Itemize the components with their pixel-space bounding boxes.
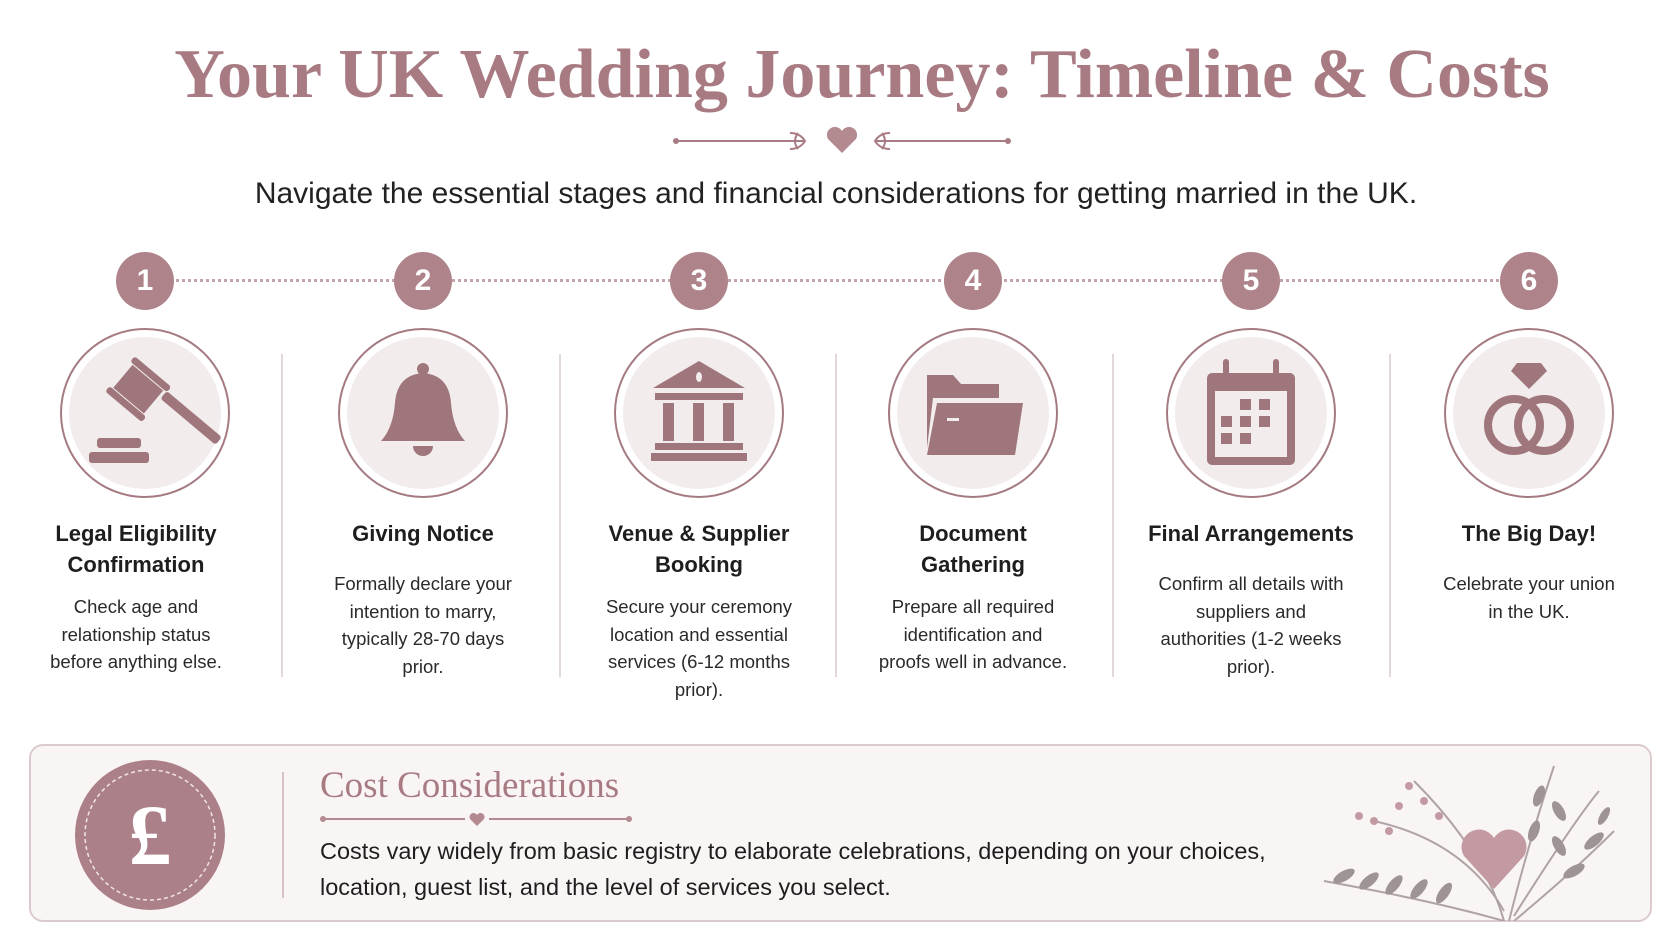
step 3 text bbox=[608, 521, 790, 577]
step 3 text: Booking bbox=[655, 552, 743, 577]
step 4: document gathering bbox=[879, 328, 1067, 672]
step 3: venue booking: Secure your ceremony bbox=[606, 596, 792, 617]
step 4 text: Gathering bbox=[921, 552, 1025, 577]
step 5: final arrangements bbox=[1148, 328, 1354, 677]
cost text: Costs vary widely from basic registry to elaborate celebrations, depending on your choices, bbox=[320, 838, 1266, 864]
step 5: final arrangements: authorities (1-2 weeks bbox=[1160, 628, 1341, 649]
step 2: giving notice: prior. bbox=[402, 656, 444, 676]
step 6: big day bbox=[1443, 328, 1615, 622]
step 2: giving notice: intention to marry, bbox=[350, 600, 496, 622]
step 3: venue booking bbox=[606, 328, 792, 700]
subtitle: Navigate the essential stages and financial considerations for getting married in the UK. bbox=[255, 177, 1417, 210]
step 1: legal eligibility: Check age and bbox=[74, 596, 198, 617]
step 3: venue booking: prior). bbox=[675, 678, 723, 700]
step 4: document gathering: Prepare all required bbox=[892, 596, 1054, 617]
icon: folder bbox=[888, 328, 1058, 498]
step 6: big day: Celebrate your union bbox=[1443, 573, 1615, 594]
step numbers: 6 bbox=[1521, 264, 1537, 297]
step 1 text: Confirmation bbox=[68, 552, 204, 577]
step 3 text: Venue & Supplier bbox=[609, 521, 789, 546]
icon: building bbox=[614, 328, 784, 498]
cost text bbox=[320, 838, 1266, 900]
step 1 text bbox=[55, 521, 217, 577]
icon: rings bbox=[1444, 328, 1614, 498]
step 2: giving notice bbox=[334, 328, 512, 677]
decoration: floral heart bbox=[1324, 766, 1615, 921]
icon: pound coin bbox=[75, 760, 225, 910]
step numbers: 1 bbox=[137, 264, 153, 297]
step 3: venue booking: services (6-12 months bbox=[608, 651, 790, 672]
step 6: big day: in the UK. bbox=[1488, 600, 1570, 622]
step 4 text bbox=[919, 521, 1027, 577]
ornament: heart divider bbox=[673, 126, 1011, 153]
step numbers: 5 bbox=[1243, 264, 1259, 297]
step numbers: 2 bbox=[415, 264, 431, 297]
icon: pound coin: £ bbox=[128, 787, 172, 883]
icon: calendar bbox=[1166, 328, 1336, 498]
step 6 text: The Big Day! bbox=[1462, 521, 1596, 546]
timeline dotted line bbox=[145, 279, 1529, 282]
step 5: final arrangements: prior). bbox=[1227, 656, 1275, 676]
icon: gavel bbox=[60, 328, 230, 498]
step 1: legal eligibility bbox=[50, 328, 230, 672]
step 4 text: Document bbox=[919, 521, 1027, 546]
step 2: giving notice: Formally declare your bbox=[334, 573, 512, 594]
step 1: legal eligibility: relationship status bbox=[61, 624, 211, 644]
step 4: document gathering: proofs well in advance. bbox=[879, 651, 1067, 672]
heading ornament bbox=[320, 813, 632, 826]
step 1 text: Legal Eligibility bbox=[55, 521, 217, 546]
title: Your UK Wedding Journey: Timeline & Costs bbox=[174, 36, 1550, 113]
step 3: venue booking: location and essential bbox=[610, 624, 788, 644]
step 1: legal eligibility: before anything else. bbox=[50, 651, 222, 672]
step numbers: 3 bbox=[691, 264, 707, 297]
panel: cost considerations bbox=[29, 744, 1652, 922]
icon: bell bbox=[338, 328, 508, 498]
step 5 text: Final Arrangements bbox=[1148, 521, 1354, 546]
step 2 text: Giving Notice bbox=[352, 521, 494, 546]
step 2: giving notice: typically 28-70 days bbox=[342, 628, 504, 649]
step numbers: 4 bbox=[965, 264, 981, 297]
step 5: final arrangements: suppliers and bbox=[1196, 600, 1306, 622]
step numbers bbox=[116, 252, 1558, 310]
step 5: final arrangements: Confirm all details with bbox=[1158, 573, 1344, 594]
cost text: location, guest list, and the level of services you select. bbox=[320, 874, 891, 900]
cost heading: Cost Considerations bbox=[320, 765, 619, 806]
step 4: document gathering: identification and bbox=[904, 624, 1042, 644]
